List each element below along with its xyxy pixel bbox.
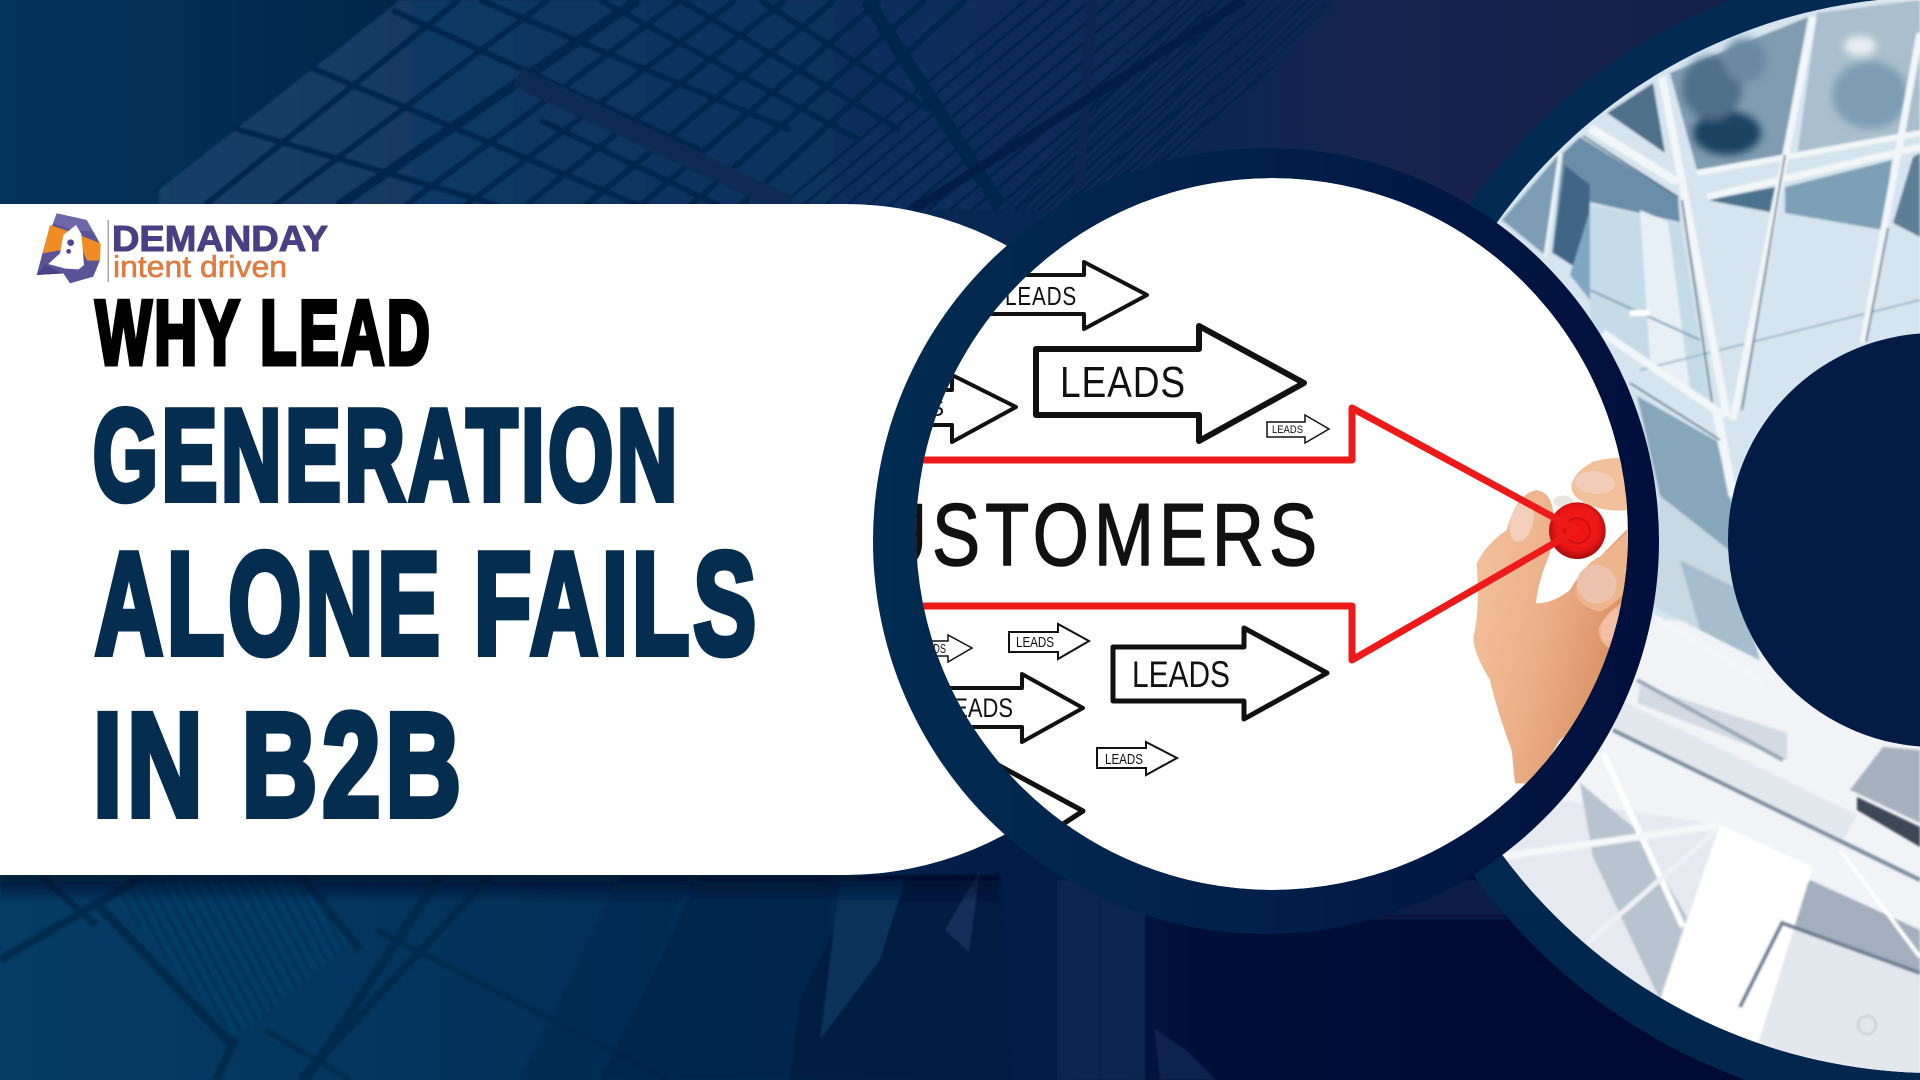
upper glass panes — [1496, 0, 1920, 661]
arrow: clipped small leads: LEADS — [916, 641, 946, 656]
white window frames — [1545, 17, 1920, 682]
arrow: lower clipped leads: LEADS — [941, 693, 1013, 723]
logo wordmark: DEMANDAY — [112, 218, 328, 259]
marker tip — [1553, 496, 1573, 508]
icon: rocket D mark — [37, 213, 101, 283]
arrow: small leads: LEADS — [1016, 634, 1054, 651]
arrow: partial head bottom left — [998, 765, 1083, 826]
tree reflections — [1682, 36, 1908, 155]
big circle ring at right — [1364, 0, 1920, 1080]
arrow: small leads lower: LEADS — [1105, 751, 1143, 768]
arrow: large leads: LEADS — [1060, 358, 1186, 407]
arrow: tiny leads — [1267, 415, 1329, 443]
arrow: top leads: LEADS — [1005, 281, 1077, 311]
arrow: small leads lower — [1097, 742, 1177, 775]
title line 2: GENERATION — [93, 384, 681, 528]
dark circle at far right — [1728, 333, 1920, 747]
title — [93, 283, 760, 848]
arrow: large leads — [1036, 326, 1304, 441]
title line 4: IN B2B — [93, 684, 466, 848]
arrow: lower clipped leads — [950, 672, 1086, 744]
arrow: clipped small leads — [932, 634, 974, 664]
arrow: clipped leads: LEADS — [872, 395, 944, 422]
top glass facade panels — [159, 0, 1340, 210]
title line 1: WHY LEAD — [96, 283, 432, 384]
hand holding marker — [1473, 458, 1633, 783]
center circle photo: leads arrows and hand — [916, 178, 1628, 890]
logo tagline: intent driven — [113, 249, 287, 284]
white title pill — [0, 204, 1180, 875]
center circle ring — [873, 148, 1659, 934]
lower beams and glass — [1500, 680, 1920, 1080]
big red customers arrow label: CUSTOMERS — [818, 485, 1322, 584]
arrow: tiny leads: LEADS — [1272, 424, 1303, 436]
arrow: clipped leads — [932, 374, 1018, 444]
arrow: small leads — [1009, 624, 1089, 659]
arrow: lower large leads: LEADS — [1132, 654, 1230, 695]
red customers arrow outline — [900, 408, 1577, 660]
arrow: lower large leads — [1113, 628, 1327, 719]
bottom glass facade panels — [0, 870, 1510, 1080]
arrow: top leads — [990, 260, 1150, 332]
photo: glass building roof inside big circle — [1496, 0, 1920, 1073]
logo: Demanday intent driven — [37, 213, 328, 284]
title line 3: ALONE FAILS — [95, 522, 760, 684]
divider — [108, 220, 109, 282]
